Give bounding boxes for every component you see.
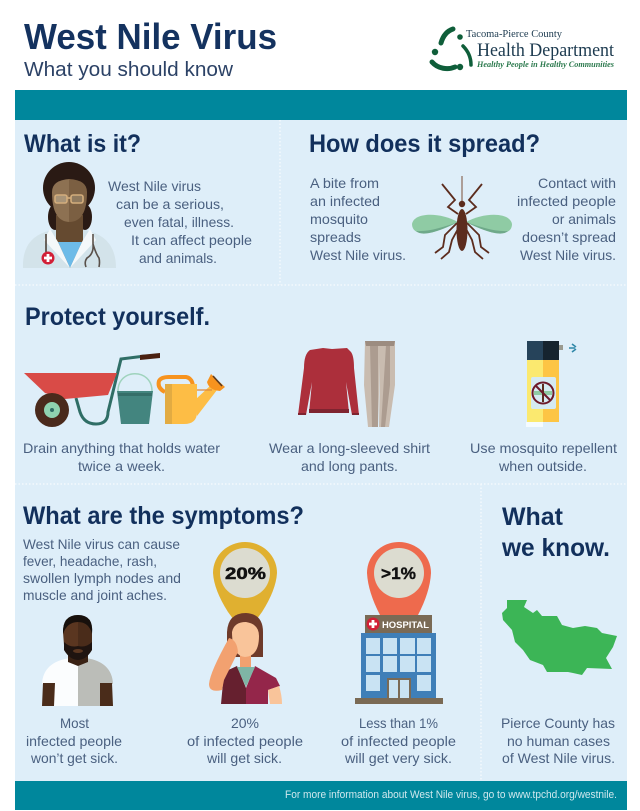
text block: what is it: It can affect people — [131, 232, 252, 248]
icon: repellent spray — [526, 341, 576, 427]
caption: 20 percent — [187, 715, 303, 766]
icon: bucket — [117, 374, 153, 424]
caption: less than 1 percent: of infected people — [341, 733, 456, 749]
text block: symptoms list — [23, 536, 181, 603]
icon: orange 1% pin: >1% — [381, 564, 416, 583]
logo: Tacoma-Pierce County Health Department: Tacoma-Pierce County — [466, 28, 562, 40]
icon: long-sleeved shirt — [298, 348, 359, 415]
text block: a bite: spreads — [310, 229, 361, 245]
caption: Pierce County — [501, 715, 615, 766]
heading: symptoms: What are the symptoms? — [23, 502, 304, 530]
background panel — [15, 120, 627, 781]
text block: contact: infected people — [517, 193, 616, 209]
text block: a bite: mosquito — [310, 211, 368, 227]
caption: 20 percent: 20% — [231, 715, 259, 731]
top teal band — [15, 90, 627, 120]
logo: Tacoma-Pierce County Health Department — [432, 28, 615, 70]
caption: Pierce County: Pierce County has — [501, 715, 615, 731]
text block: a bite: an infected — [310, 193, 380, 209]
text block: symptoms list: muscle and joint aches. — [23, 587, 167, 603]
heading: what we know — [501, 503, 610, 562]
heading: what we know: What — [502, 503, 564, 531]
panel: how does it spread — [309, 130, 616, 263]
text block: what is it: even fatal, illness. — [124, 214, 234, 230]
heading: how does it spread: How does it spread? — [309, 130, 540, 158]
footer band — [15, 781, 627, 810]
caption: drain water — [23, 440, 220, 474]
logo: Tacoma-Pierce County Health Department: Healthy People in Healthy Communities — [476, 60, 614, 69]
text block: a bite: West Nile virus. — [310, 247, 406, 263]
text block: symptoms list: West Nile virus can cause — [23, 536, 180, 552]
icon: doctor — [23, 162, 116, 268]
icon: long pants — [364, 341, 395, 427]
text block: what is it: can be a serious, — [116, 196, 224, 212]
caption: most people — [26, 715, 122, 766]
footer band: For more information about West Nile virus, go to www.tpchd.org/westnile. — [285, 789, 617, 801]
icon: sick woman — [209, 613, 282, 704]
caption: repellent: when outside. — [498, 458, 587, 474]
panel: what we know — [501, 503, 617, 766]
caption: Pierce County: no human cases — [507, 733, 610, 749]
caption: wear clothes — [269, 440, 430, 474]
icon: hospital: HOSPITAL — [382, 620, 430, 630]
icon: orange 1% pin — [367, 542, 431, 615]
text block: a bite — [310, 175, 406, 263]
text block: contact: West Nile virus. — [520, 247, 616, 263]
caption: most people: infected people — [26, 733, 122, 749]
text block: what is it: and animals. — [139, 250, 217, 266]
caption: wear clothes: and long pants. — [301, 458, 398, 474]
text block: contact: doesn’t spread — [522, 229, 616, 245]
caption: less than 1 percent: will get very sick. — [344, 750, 452, 766]
icon: yellow 20% pin — [213, 542, 277, 635]
caption: 20 percent: of infected people — [187, 733, 303, 749]
caption: most people: Most — [60, 715, 89, 731]
text block: symptoms list: swollen lymph nodes and — [23, 570, 181, 586]
title block: West Nile Virus — [24, 16, 277, 57]
text block: symptoms list: fever, headache, rash, — [23, 553, 157, 569]
caption: most people: won’t get sick. — [30, 750, 118, 766]
text block: what is it — [108, 178, 252, 266]
panel: protect yourself — [23, 303, 617, 474]
title block: What you should know — [24, 59, 234, 81]
caption: repellent — [470, 440, 617, 474]
icon: healthy man — [42, 615, 113, 706]
caption: repellent: Use mosquito repellent — [470, 440, 617, 456]
caption: 20 percent: will get sick. — [206, 750, 282, 766]
icon: mosquito — [412, 176, 512, 259]
text block: contact — [517, 175, 616, 263]
panel: symptoms — [23, 502, 456, 766]
logo: Tacoma-Pierce County Health Department: Health Department — [477, 40, 615, 61]
icon: wheelbarrow — [24, 353, 160, 427]
icon: yellow 20% pin: 20% — [225, 564, 266, 583]
heading: what is it: What is it? — [24, 130, 141, 158]
text block: what is it: West Nile virus — [108, 178, 201, 194]
icon: hospital — [355, 615, 443, 704]
text block: contact: or animals — [552, 211, 616, 227]
caption: wear clothes: Wear a long-sleeved shirt — [269, 440, 430, 456]
panel: what is it — [23, 130, 252, 268]
caption: Pierce County: of West Nile virus. — [502, 750, 615, 766]
map: Pierce County — [502, 600, 617, 675]
heading: what we know: we know. — [501, 534, 610, 562]
heading: protect yourself: Protect yourself. — [25, 303, 210, 331]
caption: drain water: Drain anything that holds water — [23, 440, 220, 456]
title block — [24, 16, 277, 81]
caption: drain water: twice a week. — [78, 458, 165, 474]
icon: watering can — [159, 374, 225, 424]
text block: contact: Contact with — [538, 175, 616, 191]
caption: less than 1 percent: Less than 1% — [359, 715, 438, 731]
text block: a bite: A bite from — [310, 175, 379, 191]
caption: less than 1 percent — [341, 715, 456, 766]
